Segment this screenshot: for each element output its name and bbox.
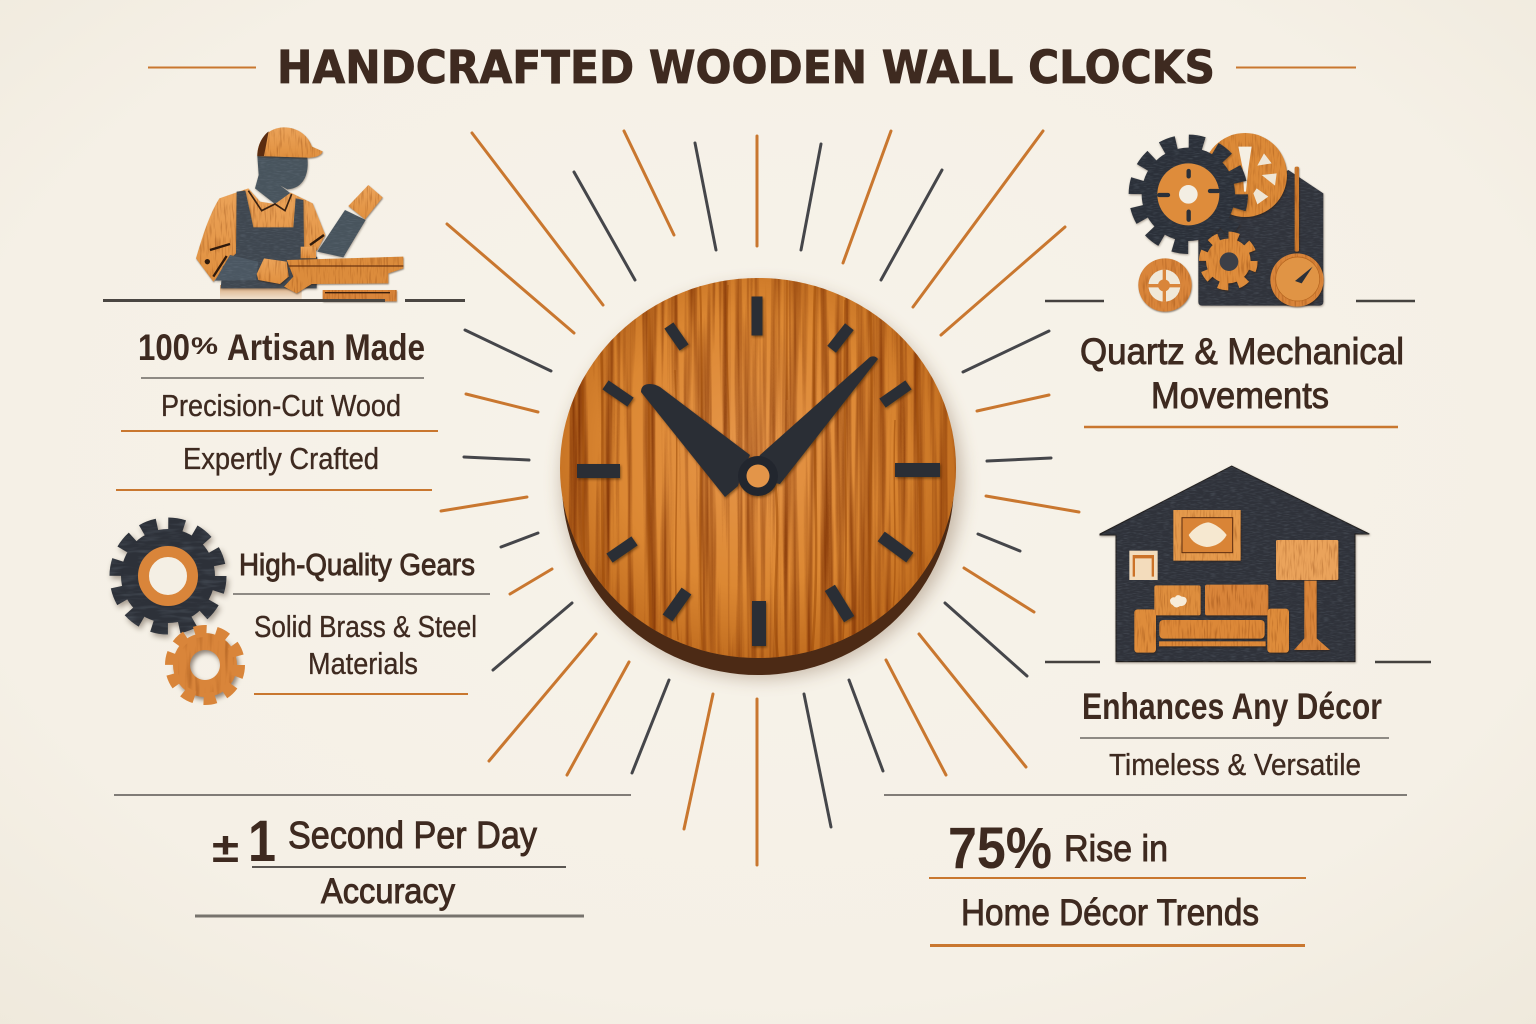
panel: enhances decor (1045, 466, 1431, 782)
text: timeless and versatile: Timeless & Versatile (1109, 747, 1361, 782)
apron lower fade (220, 285, 302, 299)
heading: quartz and mechanical movements: Quartz & Mechanical (1080, 331, 1404, 372)
icon: craftsman at workbench (196, 127, 403, 301)
heading: quartz and mechanical movements (1080, 331, 1404, 416)
panel: artisan made (103, 127, 465, 490)
small orange gear (1203, 236, 1254, 286)
text: solid brass and steel materials: Materials (308, 646, 418, 681)
text: solid brass and steel materials: Solid Brass & Steel (254, 609, 477, 644)
title: HANDCRAFTED WOODEN WALL CLOCKS (277, 41, 1215, 94)
panel: movements (1045, 133, 1415, 427)
text: precision-cut wood: Precision-Cut Wood (161, 388, 401, 423)
heading: 100% artisan made: 100 (138, 327, 190, 368)
clock shadow (562, 286, 962, 678)
heading: 100% artisan made (138, 327, 425, 368)
stat: plus or minus 1 second per day: Second Per Day (288, 815, 537, 857)
back wheel (1203, 133, 1287, 217)
heading: high-quality gears: High-Quality Gears (239, 547, 475, 582)
icon: dark and orange gears (116, 524, 239, 699)
stat: 75% rise in: 75% (948, 816, 1052, 881)
panel: high-quality gears (116, 524, 490, 699)
house silhouette (1100, 466, 1369, 662)
stat: plus or minus 1 second per day: 1 (248, 809, 276, 874)
central wooden clock (560, 278, 962, 678)
minute hand (748, 356, 878, 484)
small wheel (1138, 258, 1192, 312)
dark plaque (1198, 170, 1323, 306)
stat: plus or minus 1 second per day: ± (212, 824, 239, 871)
stat: 75% rise in (948, 816, 1168, 881)
text: home decor trends: Home Décor Trends (961, 892, 1259, 933)
clock side edge (562, 291, 954, 675)
icon: gears and pendulum (1136, 133, 1324, 312)
large picture frame (1173, 510, 1241, 561)
heading: quartz and mechanical movements: Movements (1151, 375, 1329, 416)
heading: enhances any decor: Enhances Any Décor (1082, 686, 1382, 727)
pendulum (1270, 167, 1324, 307)
sofa (1134, 585, 1289, 653)
rules beside icon (1045, 300, 1415, 302)
hub (738, 456, 778, 496)
small frame (1129, 551, 1158, 580)
text: accuracy: Accuracy (321, 872, 455, 911)
main dark gear (1136, 142, 1241, 247)
floor lamp (1276, 540, 1338, 650)
text: expertly crafted: Expertly Crafted (183, 441, 379, 476)
panel: accuracy stat (114, 795, 631, 916)
stat: 75% rise in: Rise in (1064, 828, 1168, 869)
heading: 100% artisan made: Artisan Made (227, 327, 425, 368)
clock hands (641, 356, 878, 497)
rules beside icon (1045, 661, 1431, 663)
heading: 100% artisan made: % (191, 333, 218, 360)
icon: house with furniture (1100, 466, 1369, 662)
panel: home decor trend stat (884, 795, 1407, 946)
stat: plus or minus 1 second per day (212, 809, 537, 874)
radiating rays around clock (441, 131, 1079, 865)
hour hand (641, 384, 750, 497)
text: solid brass and steel materials (254, 609, 477, 681)
clock face (560, 278, 956, 658)
baseline rule (103, 299, 465, 302)
hour markers (584, 302, 933, 639)
